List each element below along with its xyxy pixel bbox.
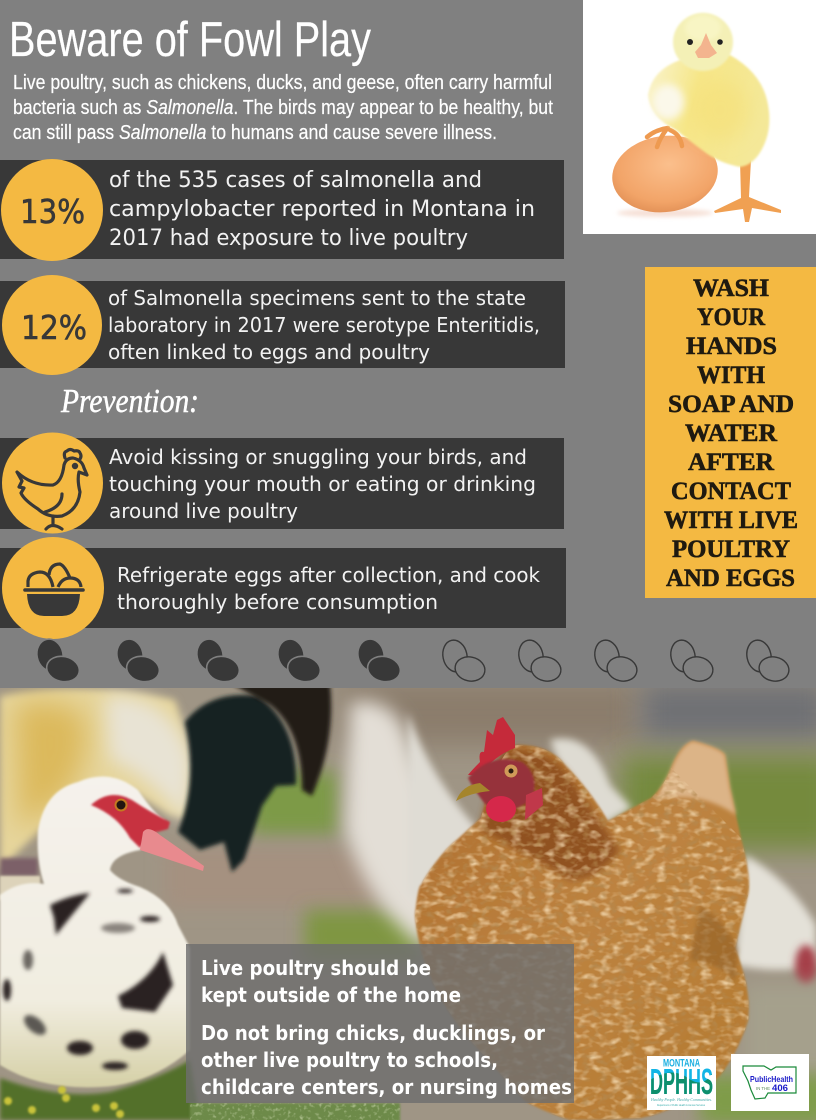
panel: refrigerate eggs <box>0 537 566 639</box>
intro text: Live poultry, such as chickens, ducks, and geese, often carry harmful <box>13 72 552 94</box>
stat panel: 12%: 12% <box>21 308 87 347</box>
hen <box>415 717 749 1120</box>
panel: avoid kissing: touching your mouth or eating or drinking <box>109 472 536 496</box>
duck <box>0 777 204 1087</box>
panel: avoid kissing <box>0 432 564 534</box>
callout: wash your hands: WITH LIVE <box>664 507 798 534</box>
logo: Montana DPHHS <box>647 1056 716 1110</box>
intro text: bacteria such as Salmonella. The birds may appear to be healthy, but <box>13 97 553 119</box>
logo: Public Health in the 406: IN THE <box>756 1086 770 1091</box>
callout: keep poultry outside the home: other live poultry to schools, <box>201 1048 498 1072</box>
logo: Public Health in the 406 <box>731 1054 809 1111</box>
panel: refrigerate eggs: Refrigerate eggs after collection, and cook <box>117 563 540 587</box>
icon: basket of eggs <box>25 564 83 616</box>
grass <box>0 1060 400 1120</box>
callout: wash your hands: HANDS <box>686 333 777 360</box>
callout: wash your hands: CONTACT <box>671 478 791 505</box>
callout: keep poultry outside the home: childcare centers, or nursing homes <box>201 1075 572 1099</box>
logo: Montana DPHHS: DPHHS <box>650 1061 713 1102</box>
callout: wash your hands: WASH <box>693 275 770 302</box>
logo: Montana DPHHS: MONTANA <box>663 1058 700 1070</box>
blurred background <box>165 680 816 1120</box>
blurred rooster left <box>0 684 331 900</box>
panel: avoid kissing: Avoid kissing or snuggling your birds, and <box>109 445 527 469</box>
stat panel: 12% <box>0 275 565 375</box>
stat panel: 12%: often linked to eggs and poultry <box>108 340 430 364</box>
callout: wash your hands: AFTER <box>688 449 775 476</box>
photo: duck and hen <box>0 680 816 1120</box>
icon: hen <box>17 450 87 529</box>
egg pictogram row: five of ten filled <box>34 637 791 685</box>
logo: Montana DPHHS: Healthy People. Healthy Communities. <box>650 1097 712 1102</box>
callout: wash your hands: SOAP AND <box>668 391 794 418</box>
intro text: can still pass Salmonella to humans and cause severe illness. <box>13 122 497 144</box>
intro text <box>13 72 553 144</box>
callout: wash your hands: WITH <box>697 362 766 389</box>
stat panel: 13%: 13% <box>20 192 85 231</box>
stat panel: 13%: of the 535 cases of salmonella and <box>109 168 482 193</box>
callout: keep poultry outside the home: Live poultry should be <box>201 956 431 980</box>
callout: keep poultry outside the home <box>186 944 574 1103</box>
stat panel: 12%: laboratory in 2017 were serotype Enteritidis, <box>108 313 540 337</box>
logo: Public Health in the 406: PublicHealth <box>750 1074 793 1084</box>
logo: Public Health in the 406: 406 <box>772 1083 788 1093</box>
logo: Montana DPHHS: Department of Public Health & Human Services <box>657 1103 705 1107</box>
callout: wash your hands <box>645 267 816 598</box>
panel: refrigerate eggs: thoroughly before consumption <box>117 590 438 614</box>
stat panel: 12%: of Salmonella specimens sent to the state <box>108 286 526 310</box>
hen head <box>468 717 515 775</box>
callout: keep poultry outside the home: kept outside of the home <box>201 983 461 1007</box>
title: Beware of Fowl Play <box>9 13 371 67</box>
stat panel: 13%: 2017 had exposure to live poultry <box>109 226 468 251</box>
panel: avoid kissing: around live poultry <box>109 499 298 523</box>
callout: keep poultry outside the home: Do not bring chicks, ducklings, or <box>201 1021 545 1045</box>
callout: wash your hands: YOUR <box>697 304 766 331</box>
stat panel: 13%: campylobacter reported in Montana in <box>109 197 535 222</box>
callout: wash your hands: WATER <box>685 420 778 447</box>
heading: prevention: Prevention: <box>60 383 199 420</box>
chick and egg photo <box>583 0 816 234</box>
callout: wash your hands: AND EGGS <box>666 565 795 592</box>
stat panel: 13% <box>0 159 564 261</box>
logo: Montana DPHHS: DPHHS <box>650 1061 713 1102</box>
callout: wash your hands: POULTRY <box>672 536 790 563</box>
